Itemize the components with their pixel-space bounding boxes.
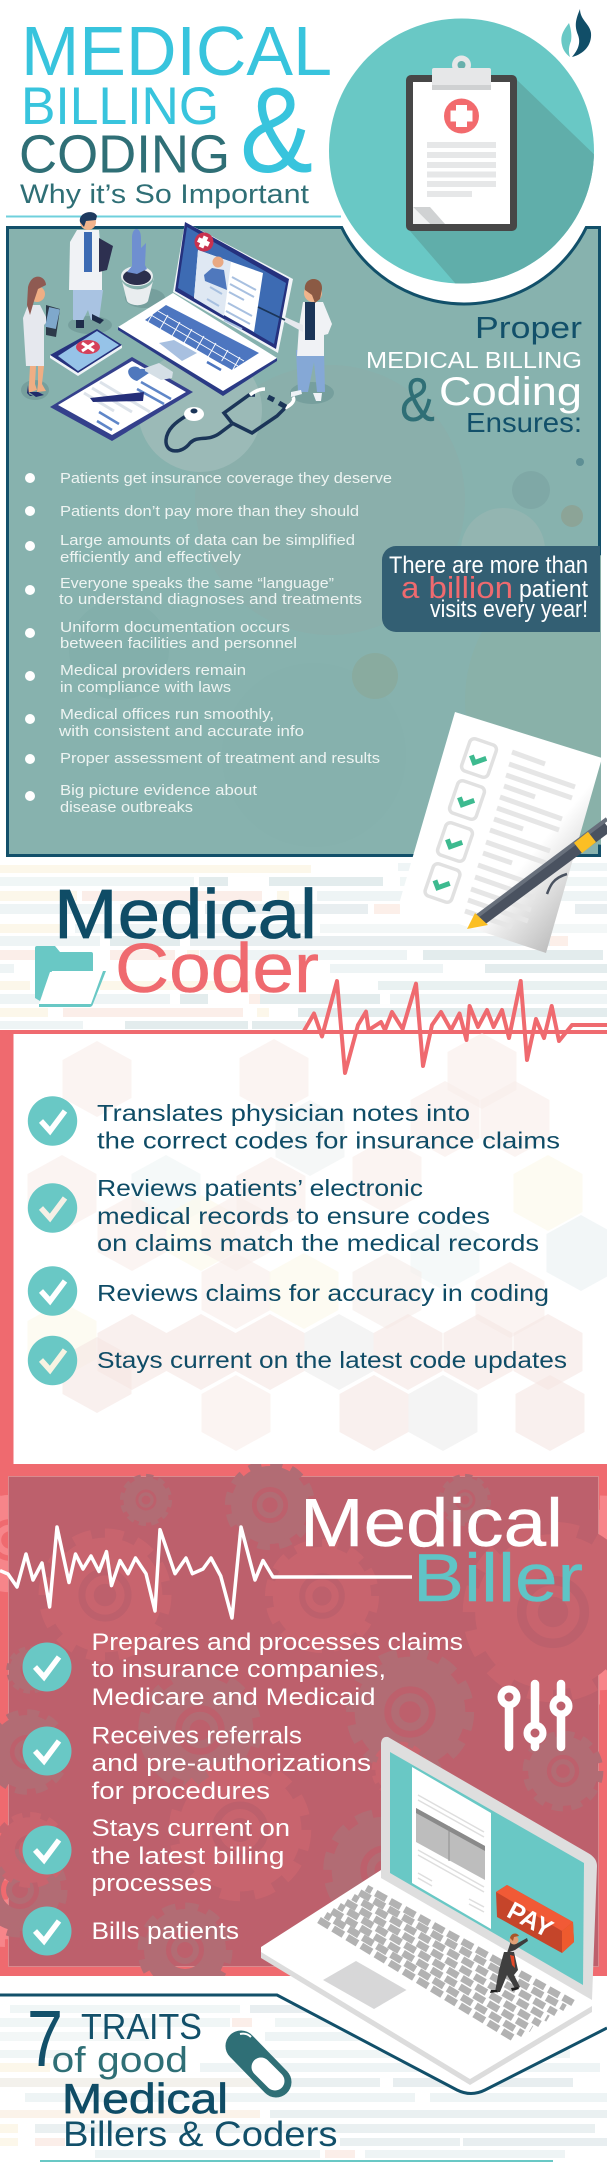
callout: a billion patient visits: patient (519, 576, 588, 603)
businessman pushing button (490, 1934, 528, 1993)
icon: pill capsule (240, 2034, 276, 2082)
title ampersand: & (240, 62, 313, 198)
biller item 1 (22, 1629, 463, 1711)
biller item 3: Stays current on (92, 1815, 290, 1842)
callout: a billion patient visits (382, 546, 600, 632)
title line: CODING: CODING (19, 124, 230, 184)
heading: 7 traits of good medical billers and coders: of good (52, 2039, 188, 2080)
biller item 1: Prepares and processes claims (92, 1629, 463, 1656)
tablet with red cross (50, 329, 122, 376)
coder item 2 (28, 1175, 539, 1256)
biller item 2: Receives referrals (92, 1722, 302, 1750)
pay button (496, 1885, 574, 1953)
header title (19, 12, 332, 209)
coder item 2: medical records to ensure codes (97, 1203, 490, 1229)
next section bar (40, 2160, 553, 2162)
bullet list: Medical offices run smoothly, (60, 706, 274, 723)
bullet list: between facilities and personnel (60, 635, 297, 652)
callout: a billion patient visits: There are more than (389, 552, 588, 579)
illustration: medical team with laptop (21, 212, 334, 451)
icon: folder (35, 946, 106, 1007)
biller item 3: processes (92, 1870, 212, 1897)
bullet list: Patients get insurance coverage they deserve (60, 470, 392, 487)
heading: 7 traits of good medical billers and coders (27, 1994, 338, 2154)
coder item 2: on claims match the medical records (97, 1230, 539, 1256)
bullet list: Proper assessment of treatment and results (60, 750, 380, 767)
background pattern: code lines (coder section) (0, 863, 607, 1029)
doctor with x-ray tablet (23, 277, 60, 397)
coder item 4 (28, 1336, 567, 1385)
bullet list: disease outbreaks (60, 799, 193, 816)
bullet list (25, 470, 392, 816)
coder item 1: Translates physician notes into (97, 1100, 470, 1126)
subtitle: Why it’s So Important (20, 179, 310, 209)
heading: medical biller: Medical (300, 1485, 563, 1561)
heading: medical biller (300, 1485, 583, 1616)
biller item 1: Medicare and Medicaid (92, 1684, 376, 1711)
bullet list: Large amounts of data can be simplified (60, 532, 355, 549)
coder item 3 (28, 1266, 549, 1316)
pay button: PAY (503, 1897, 558, 1944)
chart line: heartbeat (304, 981, 607, 1073)
bullet list: Uniform documentation occurs (60, 619, 290, 636)
heading: 7 traits of good medical billers and coders: Medical (62, 2075, 228, 2122)
heading: 7 traits of good medical billers and coders: Billers & Coders (63, 2115, 338, 2154)
heading: 7 traits of good medical billers and coders: 7 (27, 1994, 63, 2083)
bullet list: to understand diagnoses and treatments (59, 591, 362, 608)
biller item 2: and pre-authorizations (92, 1750, 371, 1777)
coder item 1: the correct codes for insurance claims (97, 1128, 560, 1154)
biller item 1: to insurance companies, (92, 1656, 386, 1683)
bullet list: Patients don’t pay more than they should (60, 503, 359, 520)
panel: medical coder (0, 981, 607, 1470)
illustration: checklist with pen (399, 712, 607, 953)
illustration: laptop with pay button (261, 1737, 597, 2085)
bullet list: Everyone speaks the same “language” (60, 575, 334, 592)
coder item 3: Reviews claims for accuracy in coding (97, 1280, 549, 1306)
keyboard (319, 1888, 573, 2039)
patient clipboard (50, 357, 193, 441)
laptop screen (381, 1737, 597, 2000)
touchpad (323, 1961, 406, 2009)
laptop (118, 222, 293, 396)
heading: proper medical billing and coding ensures: & (400, 366, 435, 435)
biller item 2 (22, 1722, 371, 1805)
callout: a billion patient visits: a billion (401, 570, 513, 605)
doctor pointing at screen (258, 279, 332, 401)
illustration: clipboard circle (329, 18, 600, 300)
heading: medical coder (35, 875, 319, 1007)
chart line: heartbeat (0, 1527, 412, 1618)
heading: proper medical billing and coding ensures: Proper (475, 310, 582, 345)
title line: MEDICAL: MEDICAL (21, 12, 332, 90)
bullet list: in compliance with laws (60, 679, 231, 696)
logo: flame (561, 9, 591, 57)
title line: BILLING: BILLING (21, 77, 219, 136)
heading: proper medical billing and coding ensures: Ensures: (466, 407, 582, 438)
heading: medical biller: Biller (413, 1540, 583, 1616)
bullet list: with consistent and accurate info (58, 723, 304, 740)
laptop base (261, 1870, 592, 2085)
bullet list: efficiently and effectively (60, 549, 242, 566)
bullet list: Medical providers remain (60, 662, 246, 679)
bullet list: Big picture evidence about (60, 782, 258, 799)
callout: a billion patient visits: visits every year! (430, 596, 588, 623)
biller item 2: for procedures (92, 1778, 270, 1805)
heading: 7 traits of good medical billers and coders: TRAITS (81, 2006, 202, 2047)
coder item 4: Stays current on the latest code updates (97, 1347, 567, 1373)
biller item 3: the latest billing (92, 1843, 284, 1870)
doctor with folder (69, 212, 113, 328)
biller item 4 (22, 1906, 239, 1956)
coder word: Coder (115, 929, 319, 1007)
coder item 2: Reviews patients’ electronic (97, 1175, 423, 1201)
background pattern: code lines (traits section) (0, 1976, 607, 2162)
heading: proper medical billing and coding ensures: Coding (439, 370, 582, 414)
biller item 4: Bills patients (92, 1918, 239, 1945)
icon: sliders (501, 1684, 569, 1747)
panel: medical biller (0, 1464, 607, 1993)
separator: dark notch line (0, 1976, 607, 2094)
coder item 1 (28, 1096, 560, 1154)
heading: proper medical billing and coding ensures: MEDICAL BILLING (366, 347, 582, 373)
potted plant (121, 229, 154, 305)
biller item 3 (22, 1815, 290, 1897)
stethoscope (166, 389, 294, 451)
medical word: Medical (54, 875, 317, 953)
heading: proper medical billing and coding ensures (366, 310, 582, 438)
panel: proper billing and coding ensures (6, 226, 601, 857)
